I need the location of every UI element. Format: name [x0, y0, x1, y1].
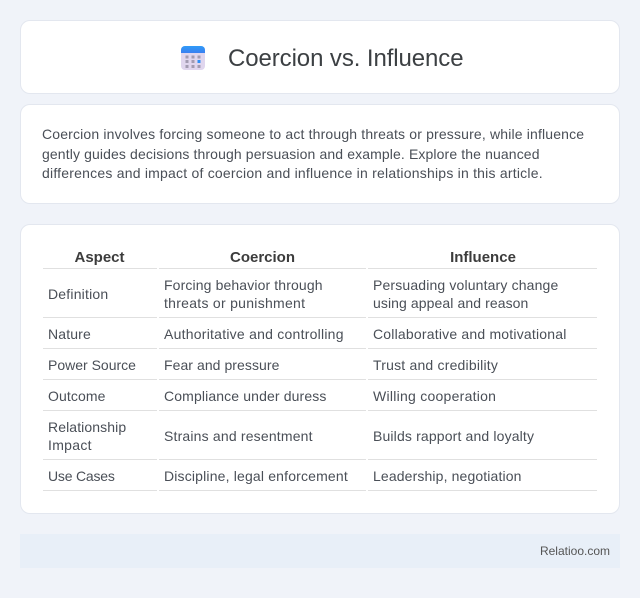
header panel — [20, 20, 620, 94]
comparison table: Compliance under duress — [164, 388, 327, 404]
comparison table: Builds rapport and loyalty — [373, 428, 534, 444]
comparison table: Authoritative and controlling — [164, 326, 344, 342]
comparison table: Strains and resentment — [164, 428, 313, 444]
title: Coercion vs. Influence — [228, 45, 463, 72]
column headers: Aspect — [74, 249, 125, 266]
comparison table: Impact — [48, 437, 92, 453]
intro text: Coercion involves forcing someone to act through threats or pressure, while influence — [42, 126, 584, 142]
row: relationship impact: Relationship — [48, 419, 126, 435]
comparison table: Forcing behavior through — [164, 277, 323, 293]
comparison table: Fear and pressure — [164, 357, 279, 373]
comparison table: Collaborative and motivational — [373, 326, 567, 342]
comparison table: Trust and credibility — [373, 357, 498, 373]
comparison table: Discipline, legal enforcement — [164, 468, 348, 484]
row: use cases: Use Cases — [48, 468, 115, 484]
column headers — [74, 249, 516, 266]
intro panel — [20, 104, 620, 204]
row: outcome: Outcome — [48, 388, 106, 404]
comparison table: threats or punishment — [164, 295, 305, 311]
row: power source: Power Source — [48, 357, 136, 373]
column headers: Coercion — [230, 249, 295, 266]
comparison table: Leadership, negotiation — [373, 468, 522, 484]
intro text — [42, 126, 584, 181]
row: definition: Definition — [48, 286, 108, 302]
icon: calendar — [181, 46, 205, 70]
footer text: Relatioo.com — [540, 544, 610, 558]
comparison table: Persuading voluntary change — [373, 277, 558, 293]
comparison table: Willing cooperation — [373, 388, 496, 404]
column headers: Influence — [450, 249, 516, 266]
row: nature: Nature — [48, 326, 91, 342]
intro text: differences and impact of coercion and influence in relationships in this article. — [42, 165, 543, 181]
footer bar — [20, 534, 620, 568]
table panel — [20, 224, 620, 514]
intro text: gently guides decisions through persuasion and example. Explore the nuanced — [42, 146, 540, 162]
comparison table — [43, 249, 597, 491]
comparison table: using appeal and reason — [373, 295, 528, 311]
